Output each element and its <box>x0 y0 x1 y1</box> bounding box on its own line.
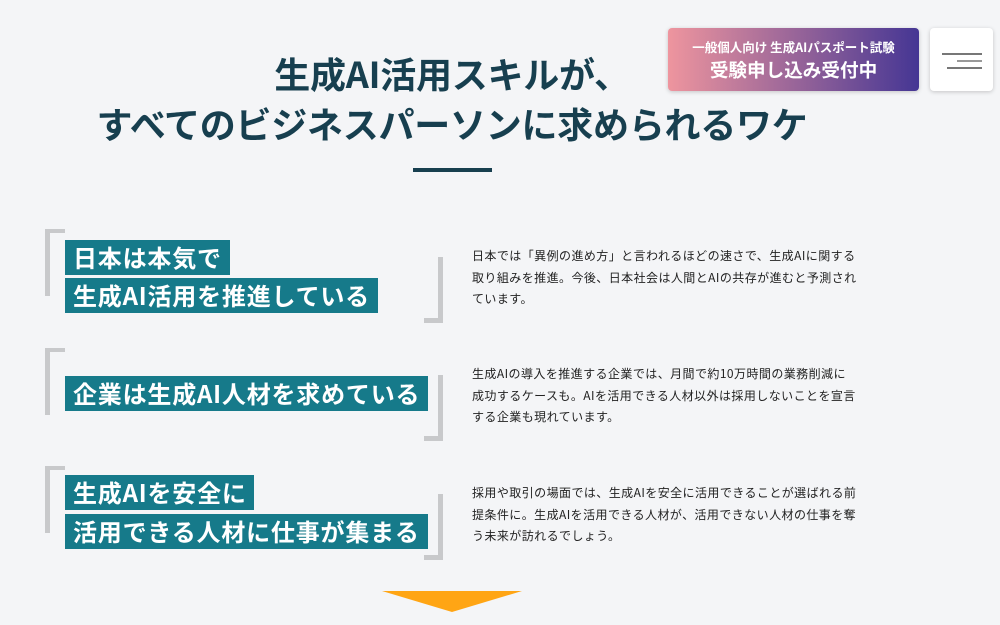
description: 生成AIの導入を推進する企業では、月間で約10万時間の業務削減に <box>472 365 846 382</box>
title underline <box>413 168 492 172</box>
heading line 2: 生成AI活用を推進している <box>73 277 370 312</box>
description: 採用や取引の場面では、生成AIを安全に活用できることが選ばれる前 <box>472 484 856 501</box>
title: 生成AI活用スキルが、 <box>274 47 630 99</box>
description: 成功するケースも。AIを活用できる人材以外は採用しないことを宣言 <box>472 387 856 404</box>
heading: 企業は生成AI人材を求めている <box>73 375 420 410</box>
heading line 2: 活用できる人材に仕事が集まる <box>73 513 420 548</box>
arrow: down <box>382 591 522 612</box>
panel: Japan promotes AI <box>45 229 857 323</box>
description: 取り組みを推進。今後、日本社会は人間とAIの共存が進むと予測され <box>472 269 857 286</box>
description: ています。 <box>472 290 533 307</box>
heading line 1: 生成AIを安全に <box>73 474 247 509</box>
description <box>472 484 856 544</box>
description: する企業も現れています。 <box>472 408 620 425</box>
description: 提条件に。生成AIを活用できる人材が、活用できない人材の仕事を奪 <box>472 506 856 523</box>
title <box>96 47 808 149</box>
exam application button: 受験申し込み受付中 <box>710 56 877 83</box>
heading line 1: 日本は本気で <box>73 239 222 274</box>
exam application button: 一般個人向け 生成AIパスポート試験 <box>692 37 895 56</box>
exam application button <box>668 28 919 91</box>
description: う未来が訪れるでしょう。 <box>472 527 620 544</box>
description <box>472 365 856 425</box>
title: すべてのビジネスパーソンに求められるワケ <box>96 97 808 149</box>
panel: work goes to safe AI users <box>45 466 856 560</box>
menu button <box>930 28 993 91</box>
panel: companies seek AI talent <box>45 348 856 441</box>
description: 日本では「異例の進め方」と言われるほどの速さで、生成AIに関する <box>472 247 856 264</box>
description <box>472 247 857 307</box>
